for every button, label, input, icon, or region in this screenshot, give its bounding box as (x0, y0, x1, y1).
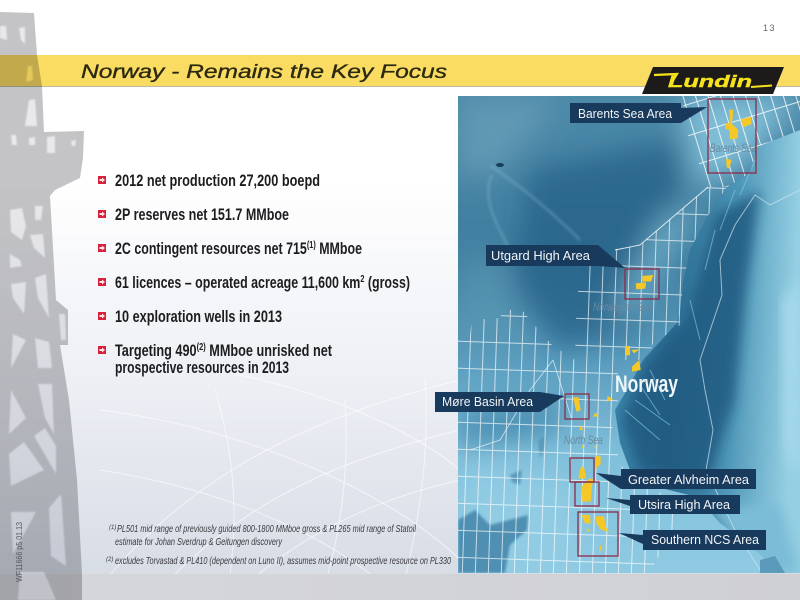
bullet 4: 61 licences – operated acreage 11,600 km (115, 273, 451, 292)
callout: Utgard High Area: Utgard High Area (491, 248, 591, 263)
callout: Barents Sea Area: Barents Sea Area (578, 106, 673, 121)
bullet 2: 2P reserves net 151.7 MMboe (115, 205, 289, 224)
footnotes: (1) (109, 525, 116, 531)
reference code: WF11666 p5 01.13 (15, 522, 24, 582)
callout: Utsira High Area (606, 495, 740, 514)
page number: 13 (763, 23, 776, 33)
map labels: North Sea (564, 435, 603, 447)
area box: Barents (708, 99, 756, 173)
area box: Utsira (575, 482, 599, 506)
bullet 6: prospective resources in 2013 (115, 358, 289, 377)
map labels: Norway (615, 371, 678, 398)
map labels (564, 143, 756, 447)
footnotes: PL501 mid range of previously guided 800-1800 MMboe gross & PL265 mid range of Statoil (117, 523, 416, 535)
yellow licence blocks: Barents and Utgard (636, 109, 752, 289)
area box: Utgard (625, 269, 659, 299)
licence grids (458, 96, 800, 573)
bullet 2 (98, 205, 289, 224)
land: Scandinavia (615, 130, 800, 573)
callout: Southern NCS Area (619, 530, 766, 550)
bullet 4: 2 (360, 274, 365, 285)
area box: Alvheim (570, 458, 594, 482)
bullet 3: MMboe (316, 239, 362, 258)
deep water shading (458, 96, 800, 570)
bullet 5: 10 exploration wells in 2013 (115, 307, 282, 326)
callout: More Basin Area (435, 392, 564, 412)
oil rig silhouette (0, 12, 84, 600)
title: Norway - Remains the Key Focus (81, 61, 447, 83)
footnotes: excludes Torvastad & PL410 (dependent on Luno II), assumes mid-point prospective resource on PL330 (115, 555, 451, 567)
map labels: Norwegian Sea (593, 302, 652, 314)
bullet 3: 2C contingent resources net 715 (115, 239, 378, 258)
callout: Southern NCS Area: Southern NCS Area (651, 532, 760, 547)
map sea base (458, 96, 800, 573)
bullet 6: (2) (197, 342, 206, 353)
bullet list (98, 171, 410, 377)
footnotes (106, 523, 451, 567)
bottom grey band (0, 574, 800, 600)
bullet 6 (98, 341, 332, 377)
callout: More Basin Area: Møre Basin Area (442, 394, 534, 409)
footnotes: estimate for Johan Sverdrup & Geitungen discovery (115, 536, 283, 548)
bullet 6: MMboe unrisked net (206, 341, 332, 360)
logo: Lundin: Lundin (668, 72, 752, 91)
bullet 4: (gross) (364, 273, 410, 292)
bullet 6: Targeting 490 (115, 341, 224, 360)
area box: More (565, 394, 589, 419)
map labels: Barents Sea (710, 143, 756, 155)
bullet 3: (1) (307, 240, 316, 251)
seabed ridge (486, 165, 581, 245)
panel: map of Norway (458, 96, 800, 573)
area box: Southern NCS (578, 512, 618, 556)
callout: Barents Sea Area (570, 103, 707, 123)
callout: Greater Alvheim Area (596, 469, 756, 489)
footnotes: (2) (106, 557, 113, 563)
bullet 5 (98, 307, 282, 326)
land: UK and islands (458, 435, 785, 573)
yellow licence blocks: mid and North Sea (573, 346, 641, 551)
logo: Lundin (642, 67, 784, 94)
callout: Utsira High Area: Utsira High Area (638, 497, 731, 512)
yellow title band (0, 55, 800, 87)
callout: Utgard High Area (486, 245, 625, 268)
callout: Greater Alvheim Area: Greater Alvheim Area (628, 472, 750, 487)
bullet 1: 2012 net production 27,200 boepd (115, 171, 320, 190)
Jan Mayen island (496, 163, 504, 167)
